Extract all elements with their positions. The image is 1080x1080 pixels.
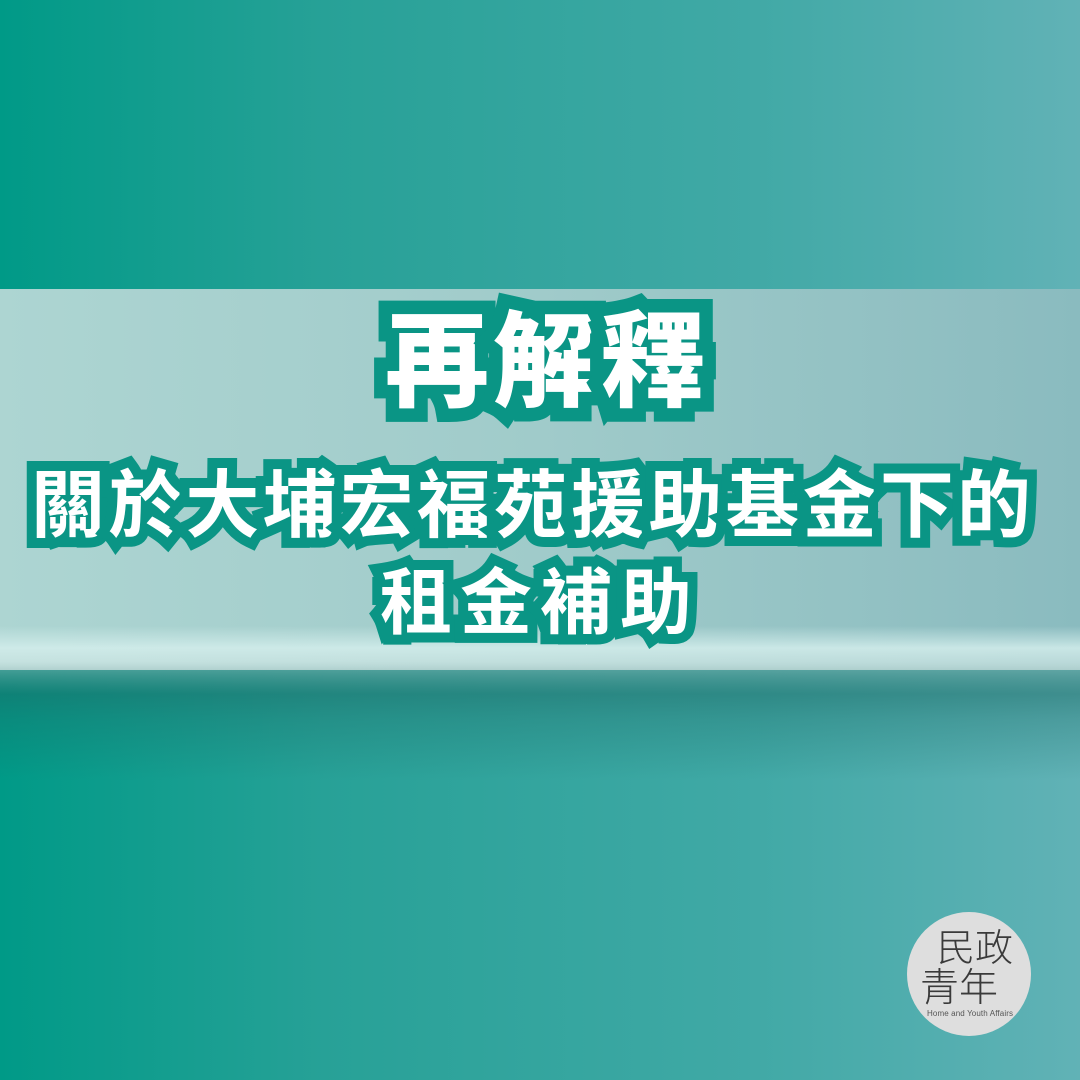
- title: 再解釋: 再解釋: [385, 305, 705, 421]
- band shadow: [0, 670, 1080, 780]
- logo: Home and Youth Affairs: [907, 912, 1031, 1036]
- logo: Home and Youth Affairs: 青年: [920, 967, 998, 1010]
- logo: Home and Youth Affairs: Home and Youth Affairs: [927, 1009, 1013, 1018]
- subtitle line 2: 租金補助: [380, 564, 692, 644]
- light horizontal band: [0, 289, 1080, 670]
- logo: Home and Youth Affairs: 民政: [937, 928, 1013, 970]
- subtitle line 1: 關於大埔宏福苑援助基金下的: [31, 464, 1031, 547]
